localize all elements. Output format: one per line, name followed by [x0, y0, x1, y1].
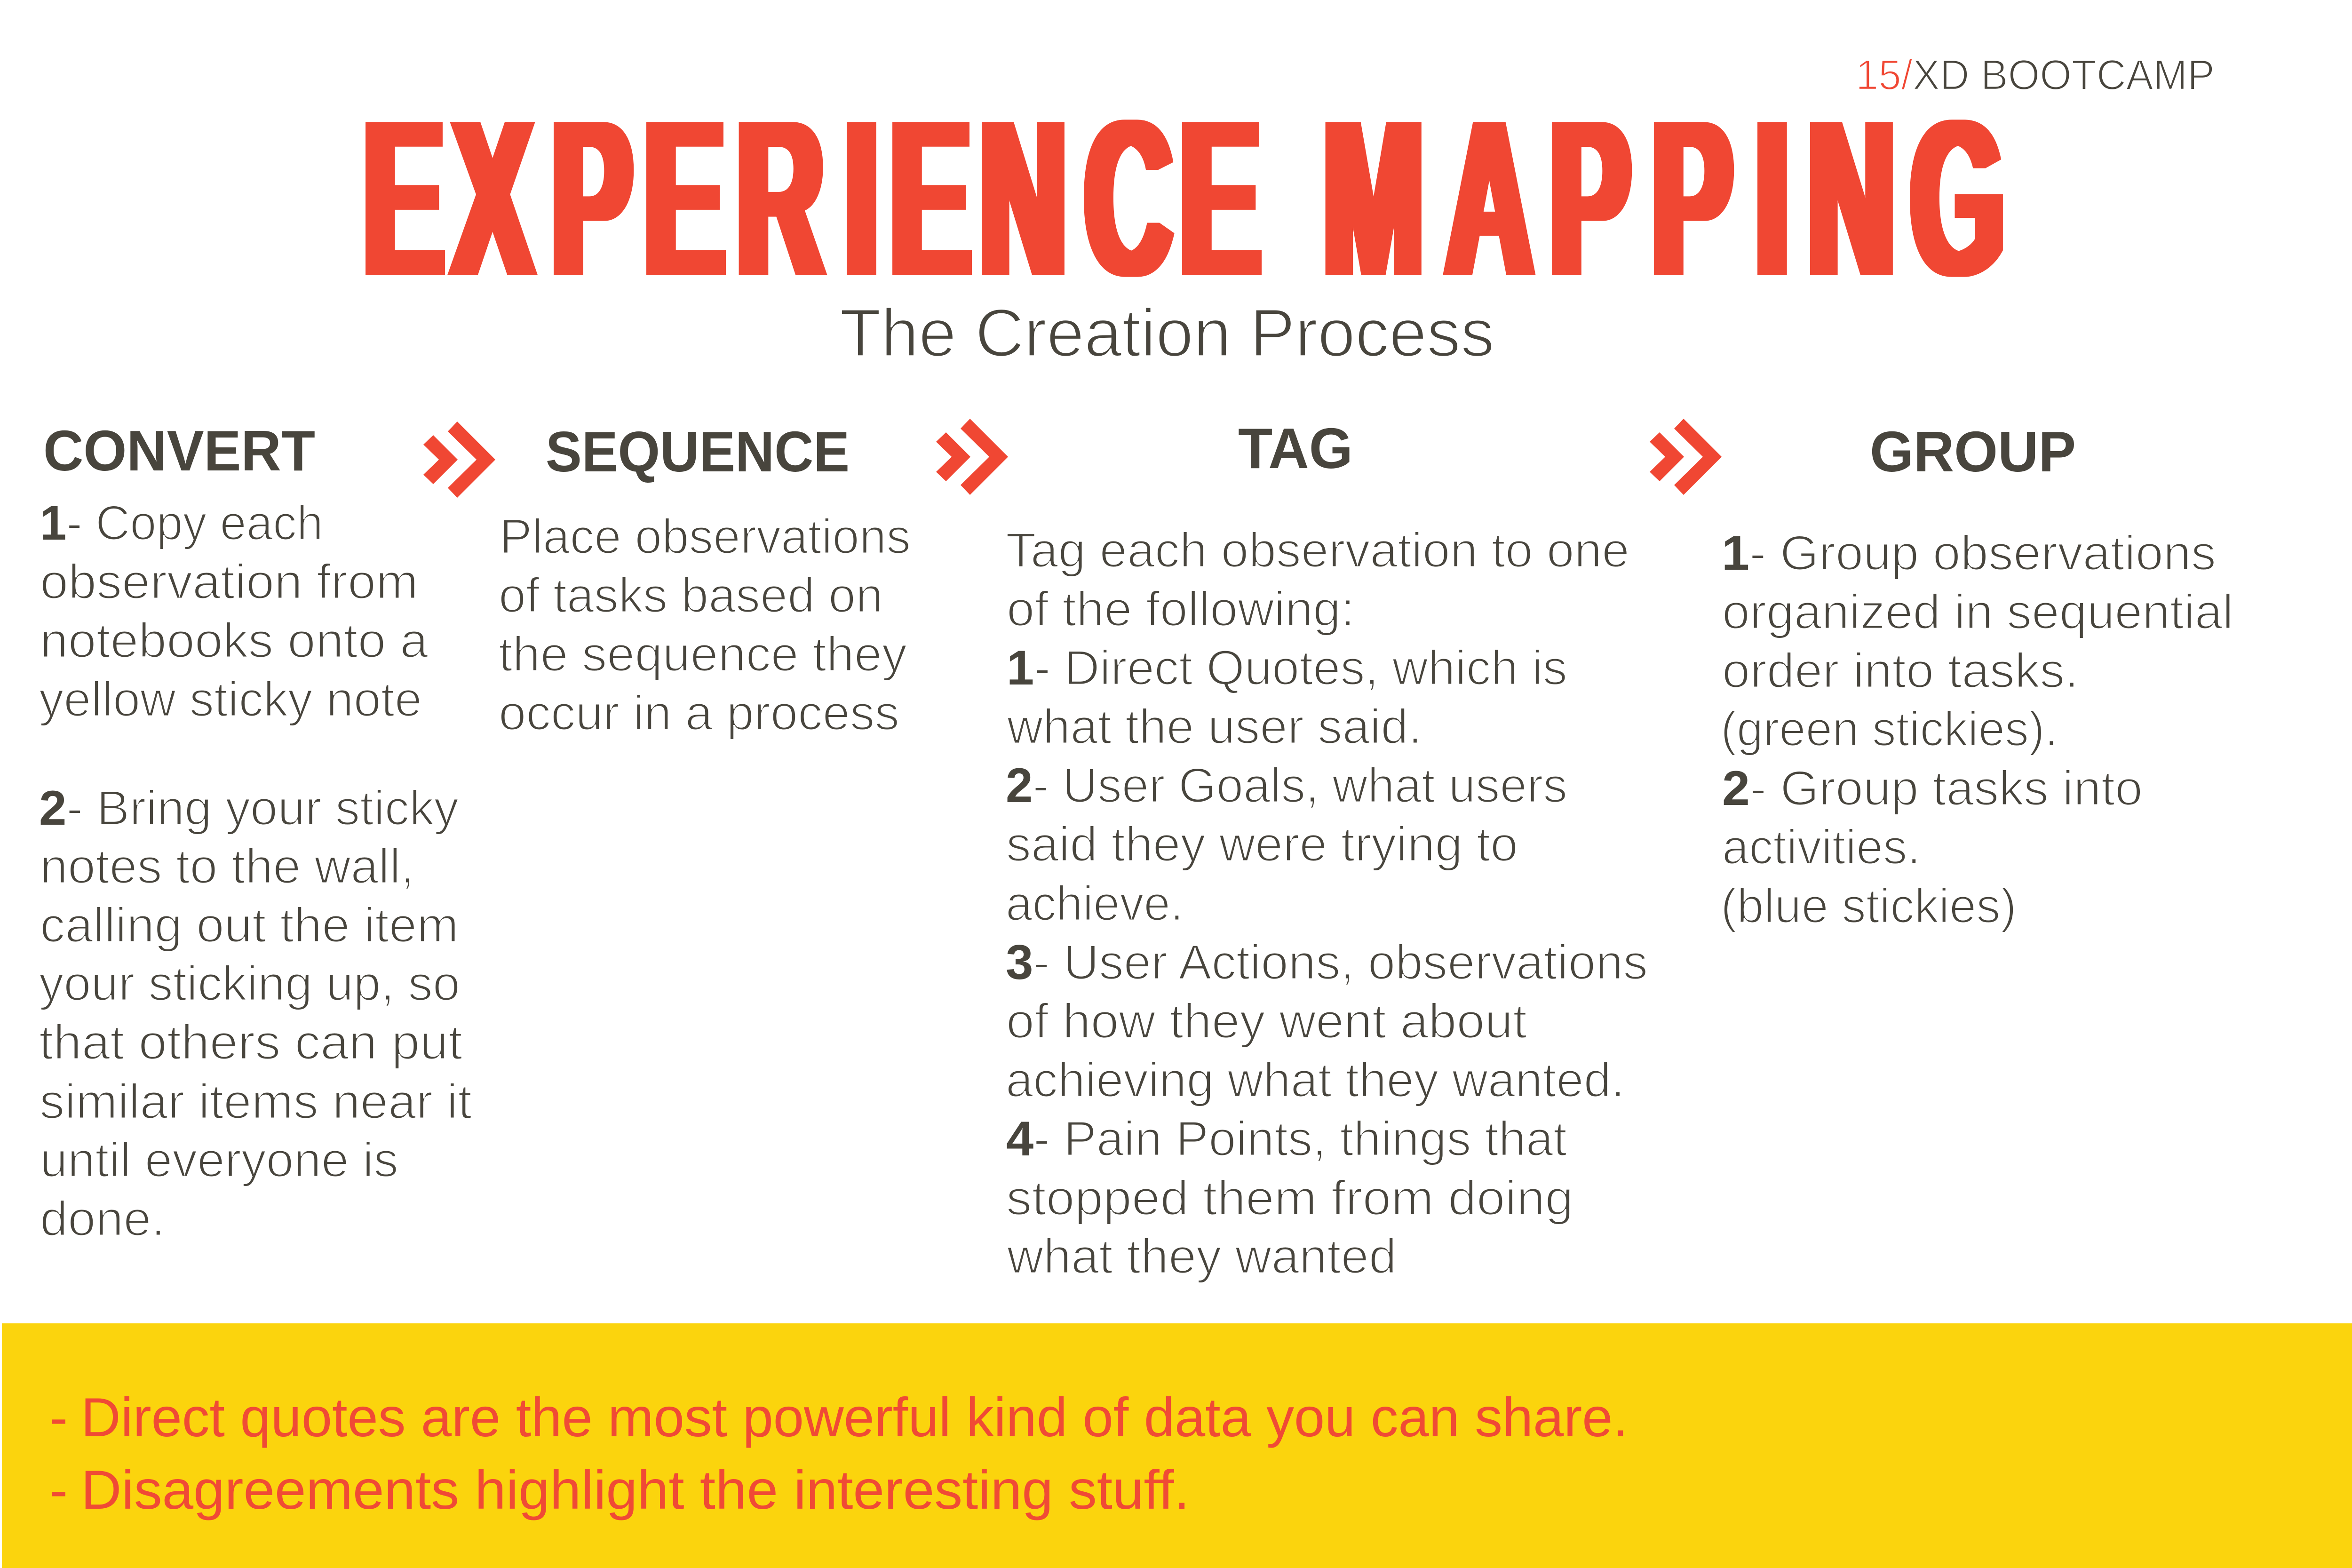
- text block: sequence body: of tasks based on: [499, 568, 883, 623]
- header label: 15/XD Bootcamp: 15/XD BOOTCAMP: [1856, 52, 2215, 99]
- text block: group body: 2- Group tasks into: [1722, 761, 2143, 816]
- text block: convert step 2: 2- Bring your sticky: [39, 781, 459, 836]
- text block: sequence body: the sequence they: [499, 627, 907, 682]
- panel: tag: [1006, 416, 1648, 1284]
- text block: group body: (blue stickies): [1721, 879, 2017, 933]
- callout text: -: [49, 1459, 68, 1520]
- text block: group body: [1721, 526, 2233, 933]
- text block: convert step 2: your sticking up, so: [39, 956, 460, 1011]
- text block: convert step 1: observation from: [40, 555, 418, 609]
- text block: tag body: of how they went about: [1006, 994, 1527, 1049]
- text block: convert step 2: that others can put: [39, 1015, 462, 1070]
- heading: convert: CONVERT: [43, 419, 315, 483]
- text block: convert step 1: [39, 496, 428, 727]
- text block: convert step 1: yellow sticky note: [39, 672, 422, 727]
- text block: tag body: 4- Pain Points, things that: [1006, 1112, 1567, 1166]
- text block: sequence body: occur in a process: [499, 686, 899, 740]
- text block: convert step 2: done.: [40, 1192, 165, 1246]
- text block: group body: order into tasks.: [1722, 644, 2079, 698]
- text block: convert step 2: [39, 781, 472, 1246]
- text block: tag body: 2- User Goals, what users: [1006, 758, 1567, 813]
- text block: convert step 2: similar items near it: [40, 1075, 472, 1129]
- text block: tag body: what they wanted: [1007, 1229, 1397, 1284]
- text block: convert step 1: 1- Copy each: [40, 496, 323, 550]
- heading: sequence: SEQUENCE: [546, 420, 850, 484]
- arrow: convert to sequence: [423, 422, 495, 498]
- subtitle: The Creation Process: [840, 295, 1494, 371]
- arrow: sequence to tag: [936, 419, 1008, 495]
- text block: tag body: 1- Direct Quotes, which is: [1007, 641, 1567, 695]
- callout text: -: [49, 1386, 68, 1448]
- text block: tag body: what the user said.: [1007, 700, 1422, 754]
- text block: group body: activities.: [1722, 820, 1921, 875]
- text block: sequence body: [499, 509, 911, 740]
- callout text: [49, 1386, 1628, 1520]
- text block: tag body: achieving what they wanted.: [1006, 1053, 1625, 1107]
- text block: tag body: Tag each observation to one: [1006, 523, 1629, 578]
- text block: tag body: of the following:: [1007, 582, 1355, 637]
- arrow: tag to group: [1650, 419, 1722, 495]
- text block: tag body: achieve.: [1006, 876, 1184, 931]
- text block: group body: (green stickies).: [1721, 702, 2058, 756]
- text block: convert step 1: notebooks onto a: [40, 613, 428, 668]
- text block: group body: 1- Group observations: [1722, 526, 2216, 581]
- text block: tag body: [1006, 523, 1648, 1284]
- text block: tag body: said they were trying to: [1006, 817, 1518, 872]
- title: EXPERIENCE MAPPING: [364, 74, 2004, 322]
- callout text: Direct quotes are the most powerful kind of data you can share.: [81, 1386, 1628, 1448]
- heading: tag: TAG: [1238, 416, 1353, 480]
- heading: group: GROUP: [1870, 420, 2076, 484]
- panel: convert: [39, 419, 472, 1246]
- text block: tag body: 3- User Actions, observations: [1006, 935, 1648, 990]
- panel: group: [1721, 420, 2233, 933]
- banner background: [2, 1323, 2352, 1568]
- panel: key takeaways banner: [2, 1323, 2352, 1568]
- text block: convert step 2: until everyone is: [40, 1133, 398, 1187]
- text block: sequence body: Place observations: [500, 509, 911, 564]
- text block: tag body: stopped them from doing: [1006, 1171, 1573, 1226]
- panel: sequence: [499, 420, 911, 740]
- text block: group body: organized in sequential: [1722, 585, 2233, 639]
- text block: convert step 2: calling out the item: [40, 898, 459, 953]
- callout text: Disagreements highlight the interesting stuff.: [81, 1459, 1190, 1520]
- text block: convert step 2: notes to the wall,: [40, 839, 414, 894]
